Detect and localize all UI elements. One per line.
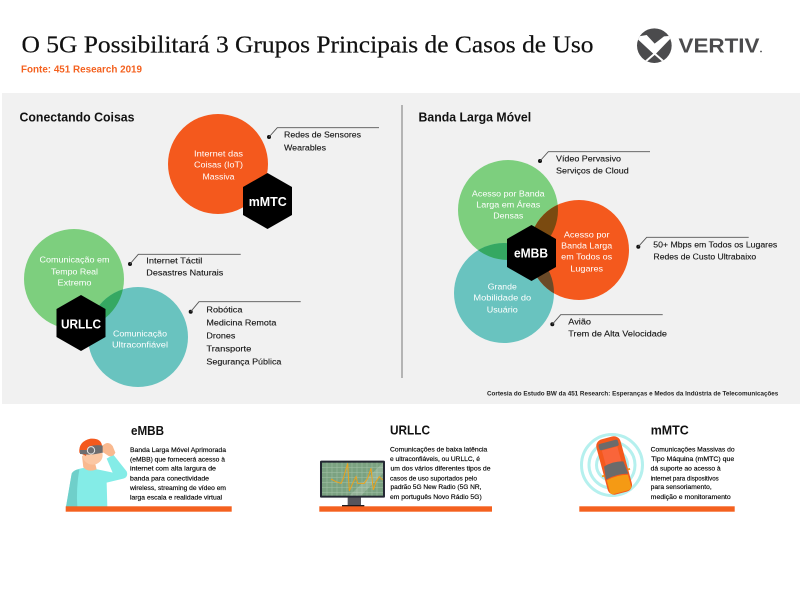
title: O 5G Possibilitará 3 Grupos Principais de Casos de Uso bbox=[22, 32, 594, 59]
venn: eMBB: Densas bbox=[493, 211, 523, 221]
text: eMBB bbox=[129, 447, 227, 501]
callout: high mobility uses bbox=[550, 315, 667, 339]
callout: real-time uses: Desastres Naturais bbox=[146, 268, 223, 278]
venn: eMBB: Mobilidade do bbox=[473, 293, 531, 303]
footnote: Cortesia do Estudo BW da 451 Research: Esperanças e Medos da Indústria de Telecomunicações bbox=[487, 391, 779, 398]
source line: Fonte: 451 Research 2019 bbox=[21, 64, 142, 75]
callout: broadband everywhere uses bbox=[636, 237, 777, 262]
logo: Vertiv bbox=[635, 28, 762, 63]
venn: eMBB: em Todos os bbox=[561, 252, 612, 262]
callout: reliable uses: Drones bbox=[206, 331, 235, 341]
text: eMBB: (eMBB) que fornecerá acesso à bbox=[130, 456, 225, 463]
venn: URLLC: Extremo bbox=[58, 278, 92, 288]
venn: URLLC: Tempo Real bbox=[51, 266, 98, 276]
callout: high mobility uses: Avião bbox=[568, 317, 591, 327]
heading: mMTC: mMTC bbox=[651, 423, 689, 437]
bar bbox=[66, 506, 232, 512]
logo: Vertiv: VERTIV bbox=[678, 35, 760, 57]
venn: eMBB: Banda Larga bbox=[561, 241, 612, 251]
venn: eMBB bbox=[454, 160, 629, 343]
bar bbox=[319, 506, 492, 512]
text: URLLC: Comunicações de baixa latência bbox=[390, 447, 488, 454]
heading: Conectando Coisas: Conectando Coisas bbox=[20, 110, 135, 124]
text: mMTC: Comunicações Massivas do bbox=[651, 447, 735, 454]
text: eMBB: banda para conectividade bbox=[130, 476, 209, 483]
venn: mMTC: Internet das bbox=[194, 148, 243, 158]
venn: eMBB: Larga em Áreas bbox=[476, 200, 540, 210]
venn: URLLC: Comunicação em bbox=[40, 254, 110, 264]
heading: eMBB: eMBB bbox=[131, 424, 164, 438]
callout: dense areas uses: Vídeo Pervasivo bbox=[556, 154, 621, 164]
callout: real-time uses bbox=[128, 254, 241, 278]
callout: broadband everywhere uses: Redes de Custo Ultrabaixo bbox=[654, 252, 756, 262]
callout: reliable uses: Medicina Remota bbox=[206, 318, 277, 328]
text: URLLC: padrão 5G New Radio (5G NR, bbox=[390, 484, 482, 491]
section: URLLC description bbox=[319, 423, 492, 512]
text: eMBB: internet com alta largura de bbox=[130, 466, 216, 473]
panel: Conectando Coisas bbox=[20, 110, 379, 387]
venn: eMBB: Acesso por bbox=[564, 230, 610, 240]
venn: mMTC: Massiva bbox=[202, 172, 235, 182]
callout: mMTC uses: Redes de Sensores bbox=[284, 130, 361, 140]
callout: dense areas uses bbox=[538, 152, 650, 176]
venn: URLLC: Ultraconfiável bbox=[112, 340, 168, 350]
callout: dense areas uses: Serviços de Cloud bbox=[556, 166, 629, 176]
text: eMBB: Banda Larga Móvel Aprimorada bbox=[130, 447, 226, 454]
text: URLLC: um dos vários diferentes tipos de bbox=[390, 465, 491, 472]
text: URLLC: em português Novo Rádio 5G) bbox=[390, 494, 482, 501]
text: mMTC: medição e monitoramento bbox=[651, 494, 731, 501]
venn: mMTC bbox=[168, 114, 292, 229]
text: eMBB: larga escala e realidade virtual bbox=[130, 494, 223, 501]
text: mMTC: internet para dispositivos bbox=[651, 475, 719, 482]
callout: reliable uses bbox=[189, 302, 301, 367]
heading: Banda Larga Móvel: Banda Larga Móvel bbox=[418, 110, 531, 124]
bar bbox=[579, 506, 735, 512]
venn: eMBB: Usuário bbox=[487, 304, 518, 314]
text: mMTC bbox=[651, 447, 735, 501]
panel: grey background bbox=[2, 93, 800, 404]
callout: reliable uses: Robótica bbox=[206, 305, 243, 315]
venn: eMBB: Grande bbox=[488, 282, 517, 292]
venn: eMBB: Acesso por Banda bbox=[472, 189, 545, 199]
venn: URLLC: Comunicação bbox=[113, 329, 167, 339]
text: mMTC: Tipo Máquina (mMTC) que bbox=[651, 456, 735, 463]
callout: mMTC uses bbox=[267, 128, 379, 153]
divider bbox=[401, 105, 403, 378]
venn: mMTC: Coisas (IoT) bbox=[194, 160, 243, 170]
callout: high mobility uses: Trem de Alta Velocidade bbox=[568, 329, 667, 339]
text: eMBB: wireless, streaming de vídeo em bbox=[129, 485, 227, 492]
icon: person with VR headset bbox=[66, 439, 127, 507]
venn: mMTC: mMTC bbox=[249, 195, 287, 209]
section: eMBB description bbox=[66, 424, 232, 512]
callout: reliable uses: Transporte bbox=[206, 344, 252, 354]
text: URLLC: casos de uso suportados pelo bbox=[390, 475, 477, 482]
icon: connected car with signal rings bbox=[582, 434, 642, 497]
callout: reliable uses: Segurança Pública bbox=[206, 357, 282, 367]
text: URLLC bbox=[390, 447, 491, 501]
text: URLLC: e ultraconfiáveis, ou URLLC, é bbox=[390, 456, 480, 463]
text: mMTC: dá suporte ao acesso à bbox=[651, 465, 721, 472]
venn: eMBB: eMBB bbox=[514, 247, 548, 261]
venn: URLLC: URLLC bbox=[61, 318, 101, 332]
callout: mMTC uses: Wearables bbox=[284, 143, 326, 153]
panel: Banda Larga Móvel bbox=[418, 110, 779, 398]
venn: URLLC bbox=[24, 229, 188, 387]
text: mMTC: para sensoriamento, bbox=[651, 484, 712, 491]
venn: eMBB: Lugares bbox=[570, 264, 603, 274]
callout: real-time uses: Internet Táctil bbox=[146, 256, 202, 266]
callout: broadband everywhere uses: 50+ Mbps em Todos os Lugares bbox=[653, 240, 777, 250]
icon: monitor with waveform bbox=[320, 461, 385, 507]
section: mMTC description bbox=[579, 423, 735, 512]
heading: URLLC: URLLC bbox=[390, 423, 430, 437]
